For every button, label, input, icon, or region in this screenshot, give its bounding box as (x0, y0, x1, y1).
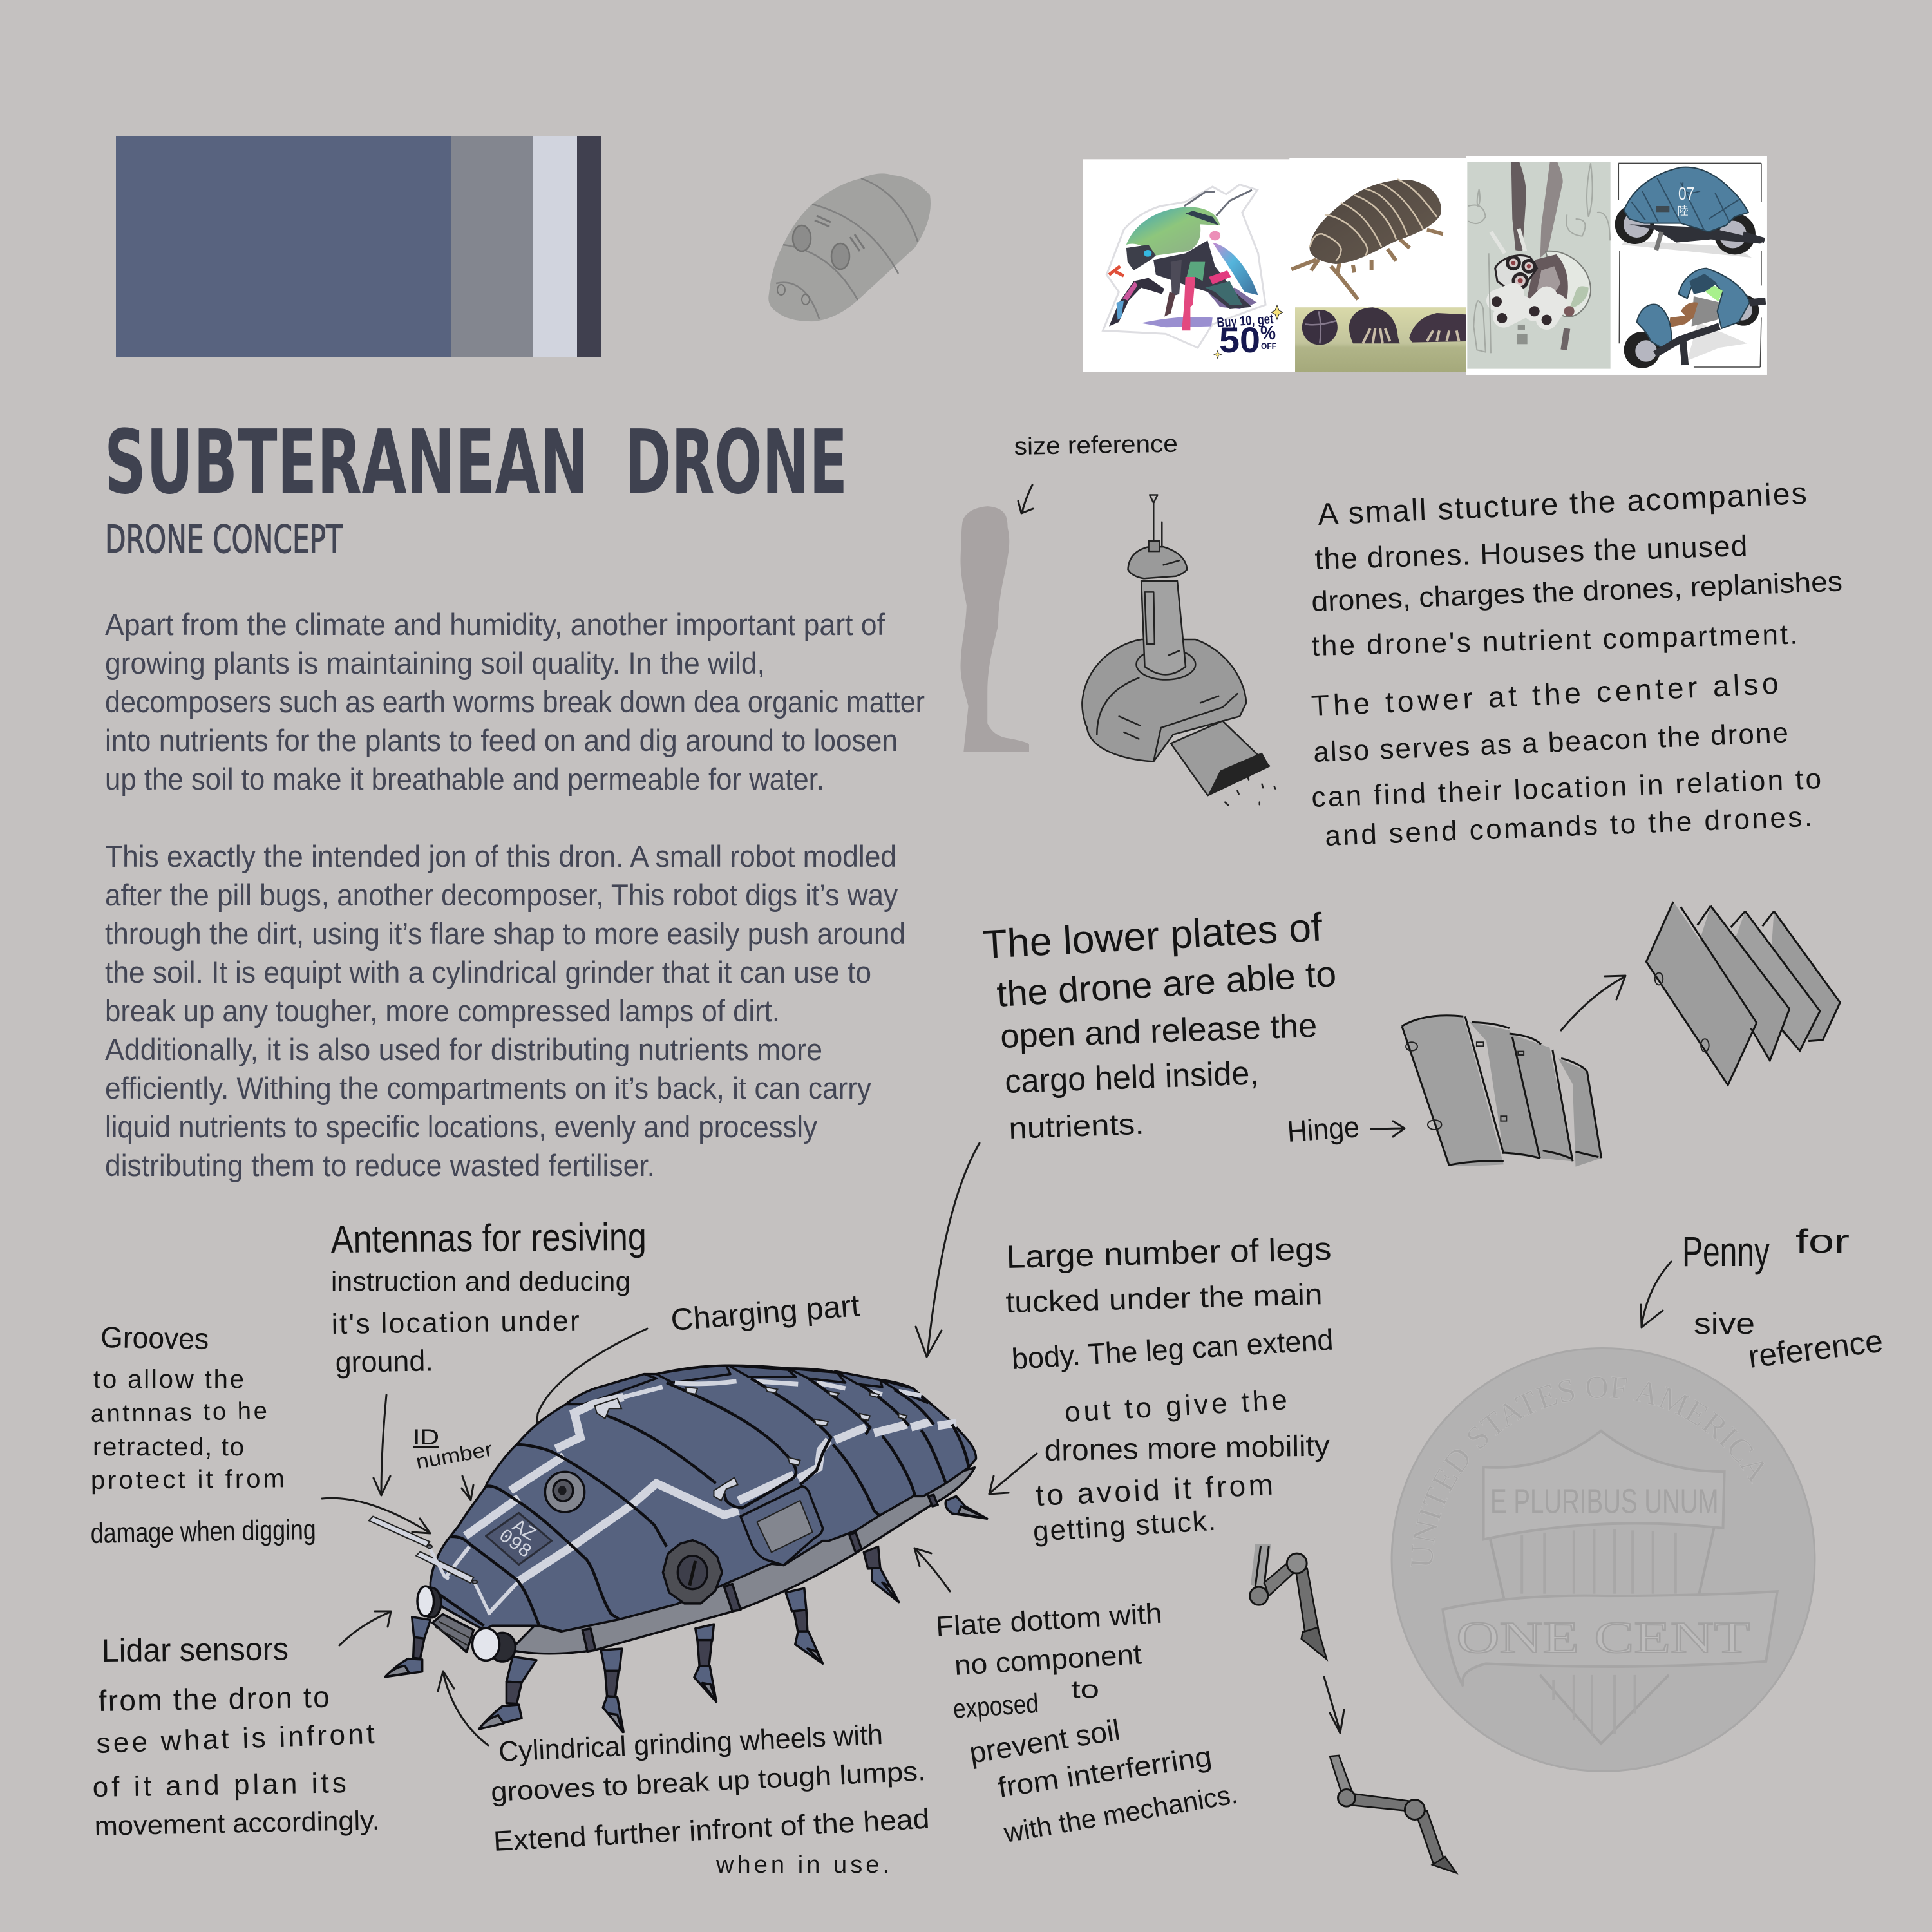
note: penny: for (1795, 1223, 1850, 1260)
arrow: flat bottom (914, 1548, 950, 1591)
note: antennas: instruction and deducing (331, 1266, 630, 1296)
reference: silver robot concept art (1466, 156, 1616, 375)
main drone illustration (369, 1365, 987, 1732)
note: lidar: movement accordingly. (94, 1805, 380, 1841)
charging panel (741, 1486, 823, 1566)
note: flat bottom: Flate dottom with (935, 1598, 1163, 1643)
underbody plate (511, 1468, 975, 1654)
id plate (486, 1513, 552, 1565)
sale badge: 50 (1219, 319, 1260, 360)
note: beacon structure: can find their location in relation to (1311, 763, 1822, 813)
penny (1391, 1347, 1816, 1772)
size reference label: size reference (1014, 431, 1178, 460)
intro paragraph: growing plants is maintaining soil quality. In the wild, (105, 646, 765, 680)
leg retracted (1250, 1544, 1327, 1659)
note: legs: out to give the (1064, 1384, 1288, 1428)
big arrow: plates to drone (916, 1143, 980, 1357)
hatch hooks (595, 1387, 907, 1501)
hinged plates open (1646, 902, 1840, 1085)
note: legs: to avoid it from (1035, 1468, 1274, 1512)
note: lidar: Lidar sensors (102, 1631, 289, 1669)
second paragraph: after the pill bugs, another decomposer, This robot digs it’s way (105, 878, 898, 912)
note: antennas (331, 1215, 647, 1379)
title: SUBTERANEAN (104, 412, 589, 514)
reference images (1083, 156, 1767, 375)
arrow: lidar (339, 1611, 391, 1645)
note: antennas: Antennas for resiving (331, 1215, 647, 1261)
sale badge (1214, 305, 1283, 360)
note: id number: ID (413, 1425, 439, 1450)
note: legs: drones more mobility (1044, 1428, 1330, 1467)
reference: pill bug photo (1289, 158, 1468, 372)
second paragraph: This exactly the intended jon of this dron. A small robot modled (105, 839, 896, 873)
note: legs: getting stuck. (1032, 1505, 1217, 1548)
title: DRONE (625, 412, 848, 514)
antennas (369, 1517, 490, 1615)
note: grinding wheels: Cylindrical grinding wheels with (498, 1719, 884, 1768)
note: lower plates: the drone are able to (996, 953, 1338, 1014)
subtitle: DRONE CONCEPT (105, 517, 343, 562)
arrow: antennas (374, 1395, 390, 1495)
arrow: id number (462, 1476, 473, 1500)
note: flat bottom: with the mechanics. (1001, 1779, 1240, 1848)
note: penny: sive (1694, 1307, 1755, 1340)
coin value: ONE CENT (1456, 1613, 1750, 1663)
note: penny: Penny (1682, 1227, 1770, 1275)
arrow: legs (989, 1454, 1037, 1494)
second paragraph: break up any tougher, more compressed lamps of dirt. (105, 994, 780, 1028)
note: flat bottom: exposed (952, 1688, 1039, 1724)
colour palette (116, 136, 601, 357)
note: grooves: Grooves (100, 1320, 209, 1356)
second paragraph: distributing them to reduce wasted fertiliser. (105, 1148, 655, 1182)
arrow: hinge (1371, 1121, 1405, 1137)
second paragraph: efficiently. Withing the compartments on it’s back, it can carry (105, 1071, 871, 1105)
drone legs (385, 1496, 987, 1732)
note: id number: number (414, 1437, 495, 1473)
id plate text: 098 (494, 1526, 535, 1564)
second paragraph: through the dirt, using it’s flare shap to more easily push around (105, 916, 905, 951)
note: lower plates: nutrients. (1009, 1107, 1144, 1145)
note: id number (413, 1425, 495, 1473)
reference: blue armoured motorbike (1615, 156, 1767, 375)
second paragraph (105, 839, 905, 1182)
hinged plates closed (1402, 1016, 1602, 1167)
note: beacon structure: the drone's nutrient compartment. (1311, 619, 1798, 662)
intro paragraph: into nutrients for the plants to feed on and dig around to loosen (105, 723, 898, 757)
intro paragraph: Apart from the climate and humidity, another important part of (105, 607, 886, 641)
note: penny (1682, 1223, 1885, 1375)
second paragraph: liquid nutrients to specific locations, evenly and processly (105, 1110, 817, 1144)
second paragraph: the soil. It is equipt with a cylindrical grinder that it can use to (105, 955, 871, 989)
note: legs (1005, 1231, 1334, 1548)
note: grooves: protect it from (91, 1464, 285, 1495)
note: antennas: ground. (335, 1343, 433, 1379)
note: legs: tucked under the main (1005, 1277, 1323, 1319)
top plate edges (566, 1365, 927, 1405)
note: grooves: retracted, to (93, 1433, 244, 1461)
note: lidar (92, 1631, 380, 1841)
sensor port (545, 1472, 585, 1512)
note: grinding wheels: grooves to break up tough lumps. (490, 1756, 927, 1807)
reference: robot beetle sticker (1083, 159, 1295, 372)
note: beacon structure: The tower at the center also (1311, 667, 1779, 723)
intro paragraph: decomposers such as earth worms break down dea organic matter (105, 685, 925, 719)
arrow: size reference (1018, 485, 1033, 513)
note: grinding wheels (490, 1719, 931, 1879)
hinge label: Hinge (1286, 1110, 1360, 1148)
sale badge: % (1260, 321, 1276, 344)
note: lower plates: cargo held inside, (1004, 1054, 1259, 1101)
note: grooves: damage when digging (90, 1514, 316, 1549)
note: lower plates: The lower plates of (981, 905, 1324, 967)
note: beacon structure: drones, charges the drones, replanishes (1311, 565, 1843, 618)
drone shell (430, 1365, 976, 1631)
note: flat bottom (935, 1598, 1240, 1848)
note: lidar: see what is infront (96, 1718, 375, 1759)
coin lettering: UNITED STATES OF AMERICA (1410, 1376, 1765, 1567)
coin banner (1443, 1591, 1777, 1686)
arrow: charging port (537, 1329, 647, 1457)
note: flat bottom: to (1071, 1676, 1099, 1703)
arrow: plates open (1561, 976, 1625, 1030)
fuel cap gear (663, 1540, 722, 1604)
note: grooves: to allow the (93, 1365, 244, 1394)
note: legs: Large number of legs (1006, 1231, 1332, 1275)
coin motto: E PLURIBUS UNUM (1490, 1483, 1718, 1521)
note: beacon structure: the drones. Houses the unused (1314, 529, 1748, 576)
top view drone sketch (768, 173, 931, 321)
bike kanji: 陸 (1677, 204, 1689, 217)
note: grinding wheels: Extend further infront of the head (493, 1803, 931, 1857)
note: beacon structure: and send comands to the drones. (1324, 801, 1813, 852)
arrow: penny (1641, 1262, 1671, 1327)
intro paragraph: up the soil to make it breathable and permeable for water. (105, 762, 824, 796)
note: antennas: it's location under (331, 1305, 580, 1340)
sale badge: OFF (1261, 341, 1276, 351)
intro paragraph (105, 607, 925, 796)
note: beacon structure (1311, 477, 1843, 852)
arrow: leg extends (1324, 1677, 1344, 1733)
shell seams (433, 1378, 969, 1631)
arrow: grinding wheels (438, 1671, 488, 1745)
note: flat bottom: no component (954, 1638, 1142, 1681)
note: flat bottom: from interferring (996, 1741, 1214, 1804)
note: legs: body. The leg can extend (1010, 1323, 1334, 1376)
arrow: grooves (322, 1498, 430, 1533)
id plate text: AZ (508, 1516, 539, 1547)
note: beacon structure: A small stucture the acompanies (1317, 477, 1808, 532)
note: lower plates: open and release the (999, 1007, 1318, 1056)
note: charging port: Charging part (670, 1289, 861, 1338)
beacon tower sketch (1082, 495, 1275, 806)
note: lidar: of it and plan its (92, 1767, 346, 1803)
note: grooves: antnnas to he (90, 1397, 267, 1428)
lidar sensors and grinder (417, 1586, 515, 1662)
note: beacon structure: also serves as a beacon the drone (1312, 717, 1789, 768)
note: lidar: from the dron to (98, 1680, 330, 1718)
leg extended (1330, 1756, 1456, 1873)
sale badge: Buy 10, get (1217, 312, 1274, 330)
note: flat bottom: prevent soil (967, 1713, 1122, 1770)
note: grooves (90, 1320, 316, 1549)
coin shield (1484, 1431, 1725, 1539)
bike lettering: 07 (1678, 184, 1694, 204)
note: grinding wheels: when in use. (715, 1852, 889, 1879)
white stripes (445, 1381, 956, 1614)
note: lower plates (981, 905, 1338, 1145)
human silhouette for scale (961, 506, 1029, 752)
second paragraph: Additionally, it is also used for distributing nutrients more (105, 1032, 822, 1066)
note: penny: reference (1747, 1323, 1885, 1375)
